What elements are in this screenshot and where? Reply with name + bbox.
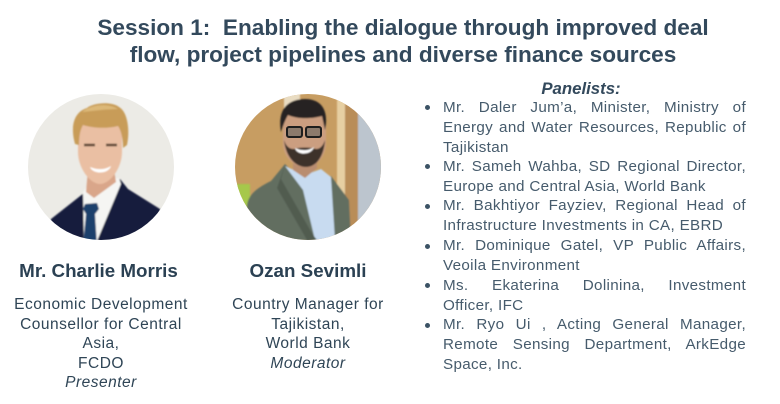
panelists list: Space, Inc. (443, 356, 523, 373)
panelists list (425, 99, 746, 373)
role: Charlie Morris: Asia, (83, 335, 119, 352)
panelists list: Mr. Daler Jum’a, Minister, Ministry of (443, 99, 746, 116)
title: flow, project pipelines and diverse finance sources (130, 42, 676, 67)
panelists list: Veoila Environment (443, 257, 580, 274)
panelists list: Europe and Central Asia, World Bank (443, 178, 706, 195)
panelists list: Mr. Ryo Ui , Acting General Manager, (443, 316, 746, 333)
role: Charlie Morris: Counsellor for Central (20, 316, 182, 333)
panelists list: Tajikistan (443, 139, 509, 156)
panelists list: Mr. Sameh Wahba, SD Regional Director, (443, 158, 746, 175)
panelists list: Ms. Ekaterina Dolinina, Investment (443, 277, 746, 294)
role: Ozan Sevimli: Moderator (270, 355, 346, 372)
role: Ozan Sevimli: Country Manager for (232, 296, 384, 313)
panelists list: Energy and Water Resources, Republic of (443, 119, 746, 136)
role: Ozan Sevimli (232, 296, 384, 372)
name: Charlie Morris: Mr. Charlie Morris (19, 260, 178, 281)
title (97, 15, 709, 67)
panelists heading: Panelists: (541, 79, 621, 98)
portrait: Ozan Sevimli (234, 90, 382, 245)
role: Charlie Morris: FCDO (78, 355, 124, 372)
panelists list: Remote Sensing Department, ArkEdge (443, 336, 746, 353)
role: Charlie Morris: Economic Development (14, 296, 188, 313)
role: Ozan Sevimli: Tajikistan, (271, 316, 345, 333)
name: Ozan Sevimli: Ozan Sevimli (250, 260, 366, 281)
panelists list: Mr. Bakhtiyor Fayziev, Regional Head of (443, 197, 746, 214)
role: Charlie Morris: Presenter (65, 374, 137, 391)
portrait: Charlie Morris (28, 94, 174, 246)
panelists list: Infrastructure Investments in CA, EBRD (443, 217, 723, 234)
panelists list: Officer, IFC (443, 297, 523, 314)
portraits (28, 94, 381, 240)
panelists list: Mr. Dominique Gatel, VP Public Affairs, (443, 237, 746, 254)
title: Session 1: Enabling the dialogue through improved deal (97, 15, 709, 40)
role: Charlie Morris (14, 296, 188, 391)
role: Ozan Sevimli: World Bank (266, 335, 350, 352)
